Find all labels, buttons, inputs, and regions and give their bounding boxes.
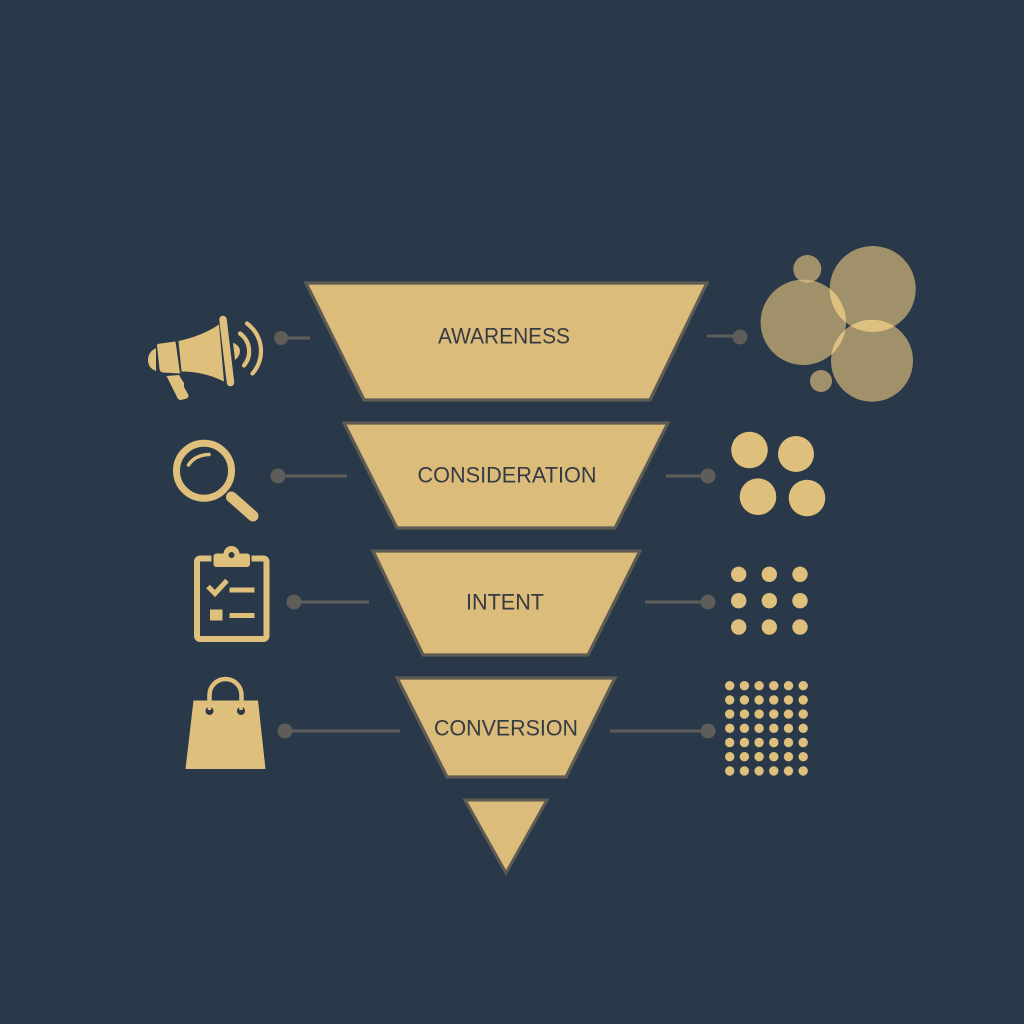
connector: conversion right bbox=[610, 724, 716, 738]
icon: clipboard checklist bbox=[197, 546, 266, 639]
connector: awareness left bbox=[274, 331, 310, 345]
funnel stage: consideration: CONSIDERATION bbox=[418, 462, 596, 488]
funnel stage: intent: INTENT bbox=[466, 590, 544, 614]
connector: intent left bbox=[286, 594, 369, 610]
icon: overlapping translucent circles bbox=[761, 246, 916, 402]
icon: dense dot grid bbox=[725, 681, 808, 776]
icon: nine dot grid bbox=[731, 567, 808, 635]
funnel stage: conversion: CONVERSION bbox=[434, 716, 578, 740]
icon: megaphone bbox=[148, 320, 261, 400]
funnel stage: awareness bbox=[306, 283, 707, 400]
icon: magnifying glass bbox=[176, 443, 253, 516]
connector: intent right bbox=[645, 594, 716, 610]
connector: consideration right bbox=[666, 468, 716, 484]
connector: consideration left bbox=[270, 468, 347, 484]
funnel stage: awareness: AWARENESS bbox=[438, 324, 570, 348]
funnel tip triangle bbox=[465, 800, 547, 873]
connector: awareness right bbox=[707, 330, 748, 344]
funnel stage: consideration bbox=[344, 423, 668, 528]
funnel stage: conversion bbox=[397, 678, 615, 777]
icon: four circles bbox=[731, 432, 825, 516]
connector: conversion left bbox=[278, 724, 400, 738]
funnel stage: intent bbox=[373, 551, 640, 655]
marketing funnel infographic bbox=[148, 246, 916, 876]
icon: shopping bag bbox=[186, 679, 266, 769]
